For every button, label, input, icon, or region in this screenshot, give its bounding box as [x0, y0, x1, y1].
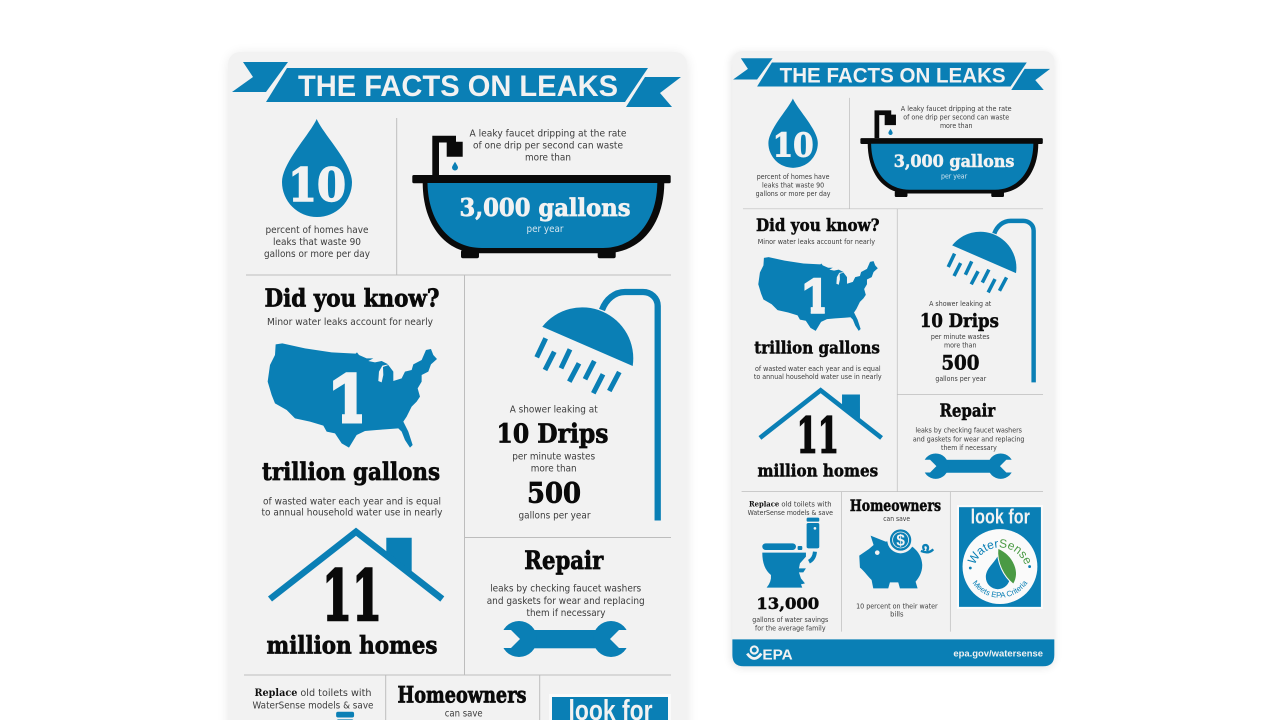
homeowners savings stat: Homeowners	[850, 496, 941, 515]
bathtub stat: 3,000 gallons: 3,000 gallons	[894, 151, 1014, 171]
repair tip with wrench: leaks by checking faucet washers	[915, 426, 1022, 435]
shower stat: 10 drips: 500	[941, 351, 979, 375]
water drop stat: 10 percent: percent of homes have	[266, 225, 368, 236]
did you know: 1 trillion gallons	[262, 284, 443, 519]
replace toilet stat	[748, 499, 833, 632]
shower stat: 10 drips: gallons per year	[935, 374, 986, 383]
shower stat: 10 drips: 10 Drips	[920, 311, 999, 332]
repair tip with wrench: and gaskets for wear and replacing	[487, 596, 645, 607]
bathtub stat: 3,000 gallons: of one drip per second can waste	[903, 113, 1009, 122]
icon: wrench	[922, 453, 1015, 479]
replace toilet stat	[252, 688, 374, 720]
replace toilet stat: WaterSense models & save	[748, 508, 833, 517]
numeral 1: 1	[802, 268, 830, 324]
shower stat: 10 drips: 10 Drips	[496, 419, 608, 449]
WaterSense badge: WaterSense	[967, 539, 1030, 564]
replace toilet stat: 13,000	[756, 594, 819, 613]
water drop stat: 10 percent	[264, 119, 370, 260]
icon: toilet	[273, 712, 354, 720]
homeowners savings stat: bills	[890, 610, 904, 619]
shower stat: 10 drips: more than	[531, 463, 577, 474]
icon: piggy bank: $	[896, 533, 905, 550]
repair tip with wrench: them if necessary	[526, 608, 606, 619]
map: United States	[758, 257, 878, 331]
title banner: THE FACTS ON LEAKS	[780, 64, 1006, 87]
homeowners savings stat: can save	[445, 709, 483, 720]
did you know: 1 trillion gallons	[754, 215, 882, 381]
homeowners savings stat: Homeowners	[398, 682, 526, 708]
water drop stat: 10 percent: leaks that waste 90	[762, 181, 825, 190]
did you know: 1 trillion gallons: Minor water leaks account for nearly	[267, 317, 433, 328]
repair tip with wrench: and gaskets for wear and replacing	[913, 434, 1024, 443]
WaterSense badge	[959, 505, 1041, 607]
panel: large infographic	[226, 52, 690, 720]
water drop stat: 10 percent: gallons or more per day	[756, 189, 831, 198]
house stat: 11 million homes: 11	[322, 556, 382, 637]
bathtub stat: 3,000 gallons: more than	[525, 153, 571, 164]
water drop stat: 10 percent: percent of homes have	[757, 172, 829, 181]
homeowners savings stat	[850, 496, 941, 619]
shower stat: 10 drips: A shower leaking at	[929, 299, 991, 308]
bathtub stat: 3,000 gallons: of one drip per second can waste	[473, 141, 623, 152]
homeowners savings stat	[398, 682, 526, 720]
repair tip with wrench: Repair	[524, 546, 604, 575]
WaterSense badge: look for	[971, 505, 1030, 528]
icon: wrench	[499, 621, 631, 657]
replace toilet stat: for the average family	[755, 623, 826, 632]
bathtub stat: 3,000 gallons: per year	[526, 224, 564, 235]
water drop stat: 10 percent: leaks that waste 90	[273, 237, 361, 248]
map: United States	[268, 343, 437, 448]
shower stat: 10 drips: more than	[944, 341, 976, 350]
shower stat: 10 drips: A shower leaking at	[510, 404, 598, 415]
water drop stat: 10 percent: 10	[773, 125, 814, 165]
did you know: 1 trillion gallons: Did you know?	[756, 215, 880, 235]
repair tip with wrench: Repair	[939, 401, 996, 422]
homeowners savings stat: 10 percent on their water	[856, 601, 938, 610]
water drop stat: 10 percent: gallons or more per day	[264, 249, 370, 260]
shower stat: 10 drips: gallons per year	[518, 511, 591, 522]
title banner	[733, 58, 1050, 90]
shower stat: 10 drips	[496, 292, 658, 522]
shower stat: 10 drips	[920, 221, 1034, 383]
footer bar	[732, 639, 1054, 666]
bathtub stat: 3,000 gallons	[860, 104, 1043, 197]
house stat: 11 million homes: million homes	[757, 460, 878, 480]
did you know: 1 trillion gallons: Did you know?	[264, 284, 440, 313]
title banner: THE FACTS ON LEAKS	[298, 70, 618, 103]
water drop stat: 10 percent	[756, 99, 831, 198]
did you know: 1 trillion gallons: to annual household water use in nearly	[754, 372, 882, 381]
did you know: 1 trillion gallons: trillion gallons	[754, 338, 880, 358]
bathtub stat: 3,000 gallons	[412, 129, 671, 258]
house stat: 11 million homes: million homes	[266, 630, 438, 659]
house stat: 11 million homes	[757, 390, 882, 480]
shower stat: 10 drips: per minute wastes	[931, 332, 990, 341]
house stat: 11 million homes: 11	[797, 408, 839, 465]
did you know: 1 trillion gallons: to annual household water use in nearly	[262, 508, 443, 519]
did you know: 1 trillion gallons: Minor water leaks account for nearly	[758, 237, 875, 246]
footer bar: EPA	[762, 648, 793, 664]
shower stat: 10 drips: per minute wastes	[512, 451, 595, 462]
repair tip with wrench: leaks by checking faucet washers	[490, 584, 641, 595]
bathtub stat: 3,000 gallons: 3,000 gallons	[460, 193, 630, 222]
shower stat: 10 drips: 500	[527, 476, 581, 509]
WaterSense badge: Meets EPA Criteria	[972, 580, 1028, 598]
repair tip with wrench	[913, 401, 1024, 479]
bathtub stat: 3,000 gallons: per year	[941, 171, 967, 180]
repair tip with wrench	[487, 546, 645, 657]
numeral 1: 1	[329, 360, 369, 439]
did you know: 1 trillion gallons: trillion gallons	[262, 457, 440, 486]
house stat: 11 million homes	[266, 532, 442, 659]
homeowners savings stat: can save	[883, 514, 910, 523]
bathtub stat: 3,000 gallons: A leaky faucet dripping at the rate	[470, 129, 626, 140]
replace toilet stat: WaterSense models & save	[252, 700, 374, 711]
title banner	[232, 62, 681, 107]
repair tip with wrench: them if necessary	[941, 443, 997, 452]
replace toilet stat: Replace old toilets with	[254, 688, 372, 699]
bathtub stat: 3,000 gallons: A leaky faucet dripping at the rate	[901, 104, 1012, 113]
replace toilet stat: gallons of water savings	[752, 615, 829, 624]
panel: small infographic	[729, 51, 1056, 670]
icon: toilet	[762, 518, 819, 588]
did you know: 1 trillion gallons: of wasted water each year and is equal	[755, 364, 881, 373]
water drop stat: 10 percent: 10	[288, 158, 346, 212]
bathtub stat: 3,000 gallons: more than	[940, 121, 972, 130]
did you know: 1 trillion gallons: of wasted water each year and is equal	[263, 496, 441, 507]
footer bar: epa.gov/watersense	[953, 649, 1043, 659]
replace toilet stat: Replace old toilets with	[749, 499, 832, 508]
